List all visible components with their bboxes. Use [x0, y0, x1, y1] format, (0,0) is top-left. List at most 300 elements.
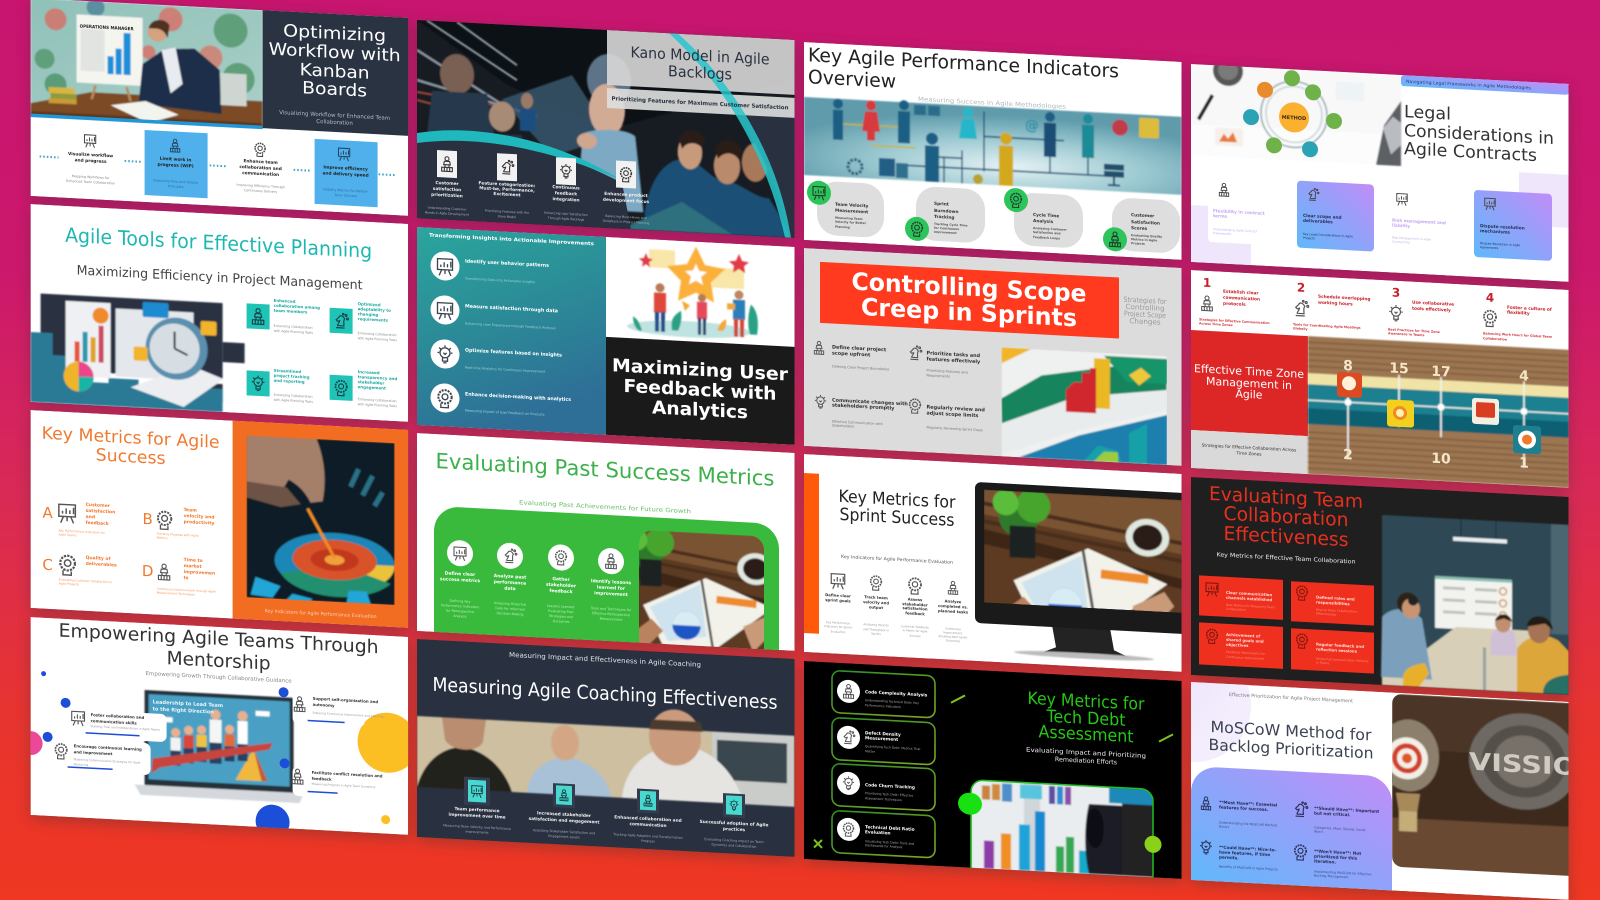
priority captions [1219, 820, 1372, 880]
feature labels: Feature categorization: [479, 180, 536, 189]
consideration labels: mechanisms [1480, 228, 1510, 236]
metric captions: and Throughput in [863, 627, 889, 632]
right teal swoosh [669, 33, 791, 238]
metric labels: output [869, 604, 883, 610]
panel: Measuring Agile Coaching Effectiveness [417, 639, 794, 857]
metric captions: Improvements [465, 830, 489, 835]
caption: Key Indicators for Agile Performance Evaluation [265, 608, 377, 620]
title: Optimizing [283, 21, 386, 47]
title: Backlogs [668, 62, 732, 84]
benefit labels: adaptability to [358, 306, 391, 313]
step numbers: 3 [1392, 286, 1400, 300]
step captions: Measurement [600, 617, 623, 622]
metric captions: Key Performance [826, 620, 850, 625]
callout captions: Fostering Continuous Improvement and Learning [313, 711, 384, 719]
step captions: Team Success [333, 193, 357, 198]
panel: Controlling Scope Creep in Sprints [804, 248, 1182, 466]
benefit labels [274, 297, 397, 391]
white icon circles [447, 539, 624, 575]
callout labels: Foster collaboration and [91, 712, 144, 720]
metric labels: Evaluation [865, 829, 891, 837]
metric labels: Code Complexity Analysis [865, 689, 928, 698]
metric labels: communication [629, 821, 667, 829]
decorative blobs [30, 671, 408, 828]
feature captions: Needs in Agile Development [425, 210, 470, 217]
step captions: Tools for Coordinating Agile Meetings [1293, 322, 1361, 330]
step captions: Evaluating Past [548, 609, 574, 614]
action captions: Real-time Analytics for Continuous Improvement [465, 366, 546, 374]
metric labels [86, 502, 215, 583]
right navy wedge [737, 115, 795, 238]
feature captions: Understanding Customer [428, 206, 467, 212]
priority labels: but not critical. [1314, 810, 1351, 817]
metric labels: improvemen [184, 569, 215, 577]
callout captions: Building Trust and Independence in Agile Teams [91, 724, 160, 732]
monitor stand [1042, 624, 1128, 657]
teal side panel [417, 227, 606, 435]
benefit captions: with Agile Planning Tools [274, 329, 313, 335]
step connectors [40, 156, 397, 175]
benefit captions: with Agile Planning Tools [274, 398, 313, 404]
gradient panel [1191, 766, 1392, 891]
progress underlines [68, 708, 345, 793]
title [1194, 362, 1304, 404]
benefit labels: requirements [358, 316, 389, 323]
step captions: Lessons Learned: [547, 604, 575, 609]
consideration labels: Risk management and [1392, 218, 1446, 226]
orange side panel [233, 421, 409, 628]
panel: Key Metrics for Tech Debt Assessment [804, 661, 1182, 891]
step labels [68, 152, 368, 178]
gradient cards [1297, 181, 1552, 261]
consideration captions: Frameworks [1213, 231, 1232, 236]
tactic labels: Communicate changes with [832, 397, 908, 407]
consideration labels: Clear scope and [1303, 213, 1342, 221]
panel: Key Metrics for Agile Success [31, 410, 409, 628]
title: Backlog Prioritization [1208, 736, 1374, 763]
card captions: Continuous Improvement [1226, 655, 1265, 661]
step captions: Across Time Zones [1199, 321, 1233, 327]
priority labels: prioritized for this [1314, 853, 1358, 861]
title: Considerations in [1404, 121, 1554, 149]
step labels: Schedule overlapping [1318, 294, 1371, 302]
step labels: working hours [1318, 300, 1353, 308]
metric labels: Quality of [86, 555, 110, 562]
feature captions: Through Agile Backlogs [547, 216, 585, 222]
milestone numbers: 2 [1343, 447, 1353, 463]
circle icons [454, 545, 616, 569]
card captions: Effectiveness [1316, 612, 1336, 617]
step captions: Visibility Metrics for Kanban [323, 187, 369, 194]
step labels: Identify lessons [591, 578, 631, 586]
step captions: Strategies and [549, 614, 573, 619]
KPI captions: Analyzing Customer [1033, 226, 1067, 232]
callout labels: Support self-organization and [313, 696, 378, 704]
letters A B C D: B [142, 510, 153, 528]
red title panel [1191, 330, 1308, 436]
step captions: Continuous Delivery [244, 188, 277, 194]
metric captions: Progress [641, 839, 655, 844]
consideration captions: Projects [1303, 236, 1315, 241]
card captions: Feedback Mechanisms for [1226, 650, 1266, 656]
feature labels: Enhances product [604, 191, 648, 199]
timeline photo [1308, 336, 1569, 488]
feature labels: Continuous [552, 184, 580, 192]
panel: Kano Model in Agile Backlogs [417, 20, 795, 240]
network illustration band: @ [1025, 118, 1039, 134]
consideration captions: Key Legal Considerations in Agile [1303, 232, 1353, 239]
navy curved footer [417, 131, 631, 229]
card captions: Keys to Team Collaboration [1316, 608, 1357, 614]
milestone numbers [1343, 358, 1529, 473]
benefit labels: Enhanced [274, 298, 296, 304]
step captions: Mapping Workflows for [72, 174, 110, 180]
feature captions [425, 204, 649, 226]
green panel [434, 506, 779, 674]
action labels: Enhance decision-making with analytics [465, 392, 571, 403]
title: Legal [1404, 102, 1451, 125]
subtitle: Evaluating Past Achievements for Future Growth [519, 499, 691, 515]
feature labels: prioritization [431, 192, 463, 199]
tactic captions [832, 363, 983, 435]
feature labels: Customer [435, 180, 460, 187]
metric labels: Analyze [945, 598, 962, 604]
benefit captions: with Agile Planning Tools [358, 336, 397, 342]
title [838, 487, 956, 531]
metric icons [59, 504, 171, 580]
subtitle [1026, 747, 1146, 768]
title [43, 426, 219, 464]
white callout cards [144, 696, 364, 796]
metric labels: Customer [86, 502, 111, 509]
metric labels: ts [184, 575, 189, 581]
consideration captions: Understanding Agile Contract [1213, 227, 1258, 234]
card labels: Defined roles and [1316, 595, 1355, 602]
panel heading: Transforming Insights into Actionable Improvements [429, 233, 594, 247]
milestone numbers: 8 [1343, 358, 1353, 374]
metric labels: velocity and [184, 513, 215, 521]
step labels: Enhance team [243, 158, 278, 166]
panel: Empowering Agile Teams Through Mentorship [30, 617, 408, 835]
metric labels [825, 592, 969, 619]
metric labels: practices [723, 826, 746, 833]
panel: Key Agile Performance Indicators Overview [804, 42, 1182, 260]
metric captions: in Metric for Agile [903, 628, 928, 633]
monitor screen photo [984, 486, 1182, 639]
subtitle: Evaluating Impact and Prioritizing [1026, 747, 1146, 760]
title [808, 44, 1119, 105]
consideration captions: Agreements [1480, 245, 1499, 250]
metric captions: Assessing Stakeholder Satisfaction and [533, 828, 595, 835]
action captions: Measuring Impact of User Feedback on Products [465, 409, 545, 417]
title [269, 24, 400, 97]
step labels: communication [1223, 295, 1260, 303]
panel: Effective Time Zone Management in Agile [1191, 270, 1569, 488]
priority labels: features for success. [1219, 804, 1269, 812]
callout captions: Mentoring [74, 762, 88, 767]
KPI captions: Satisfaction and [1033, 230, 1061, 235]
title: Tech Debt [1046, 707, 1126, 731]
metric captions [824, 620, 968, 644]
metric labels: Define clear [825, 592, 851, 598]
metric captions: Continuous [945, 626, 961, 631]
metric labels: feedback [905, 610, 925, 616]
metric captions: Indicators for Sprint [824, 624, 853, 630]
metric captions: Metrics [157, 536, 168, 540]
callout labels: communication skills [91, 718, 137, 726]
card labels: Clear communication [1226, 590, 1272, 597]
step captions: Decision-Making [496, 611, 524, 617]
benefit captions: Enhancing Collaboration [274, 393, 313, 399]
KPI captions: Tracking Cycle Time [934, 222, 968, 228]
side caption: Strategies for [1124, 295, 1167, 306]
consideration captions: Contracting [1392, 240, 1410, 244]
action labels [465, 259, 571, 403]
metric captions: Measuring Team Velocity and Performance [443, 823, 511, 831]
title: Analytics [652, 397, 748, 423]
metric captions: Sprints [871, 632, 881, 636]
title [1028, 689, 1145, 748]
metric captions: Engagement Levels [548, 834, 580, 840]
title: Agile [1236, 387, 1263, 402]
KPI labels: Sprint [934, 201, 949, 208]
card labels [1226, 590, 1364, 654]
metric captions: Tracking Progress with Agile [156, 532, 199, 538]
card labels: channels established [1226, 595, 1272, 602]
metric labels: satisfaction and engagement [529, 816, 599, 826]
panel: Agile Tools for Effective Planning [31, 204, 408, 422]
title: Workflow with [269, 40, 401, 66]
step captions: Data for Informed [495, 606, 525, 612]
metric labels: planned tasks [938, 608, 969, 615]
feature labels: feedback [555, 190, 577, 197]
step labels: protocols [1223, 301, 1246, 308]
callout captions: Mastering Communication Strategies for Agile [74, 757, 141, 765]
side caption [1124, 295, 1167, 327]
white icon circles [430, 251, 460, 413]
KPI labels: Satisfaction [1131, 219, 1160, 227]
title: Agile Tools for Effective Planning [65, 223, 372, 263]
footer caption [1202, 443, 1297, 460]
step captions [66, 174, 369, 199]
title: Measuring Agile Coaching Effectiveness [433, 674, 778, 714]
KPI labels: Tracking [934, 214, 954, 221]
subtitle: Key Metrics for Effective Team Collaboration [1216, 552, 1356, 566]
photo: meeting room [1381, 515, 1569, 695]
metric captions: Prioritizing Tech Debt: Effective [865, 791, 913, 798]
benefit labels: stakeholder [358, 379, 384, 386]
card labels: responsibilities [1316, 600, 1350, 606]
feature captions: Enhancing User Satisfaction [544, 211, 588, 217]
benefit labels: Optimized [358, 301, 381, 307]
benefit captions: Enhancing Collaboration [358, 331, 397, 337]
title: Boards [302, 78, 367, 102]
KPI labels: Burndown [934, 208, 959, 215]
priority captions: Understanding the MoSCoW Method [1219, 820, 1277, 827]
milestone markers [1337, 372, 1541, 454]
title: Creep in Sprints [861, 293, 1077, 332]
feature captions: Balancing Must-Haves and [605, 214, 647, 220]
step captions: Strategies for Effective Communication [1199, 317, 1270, 325]
tactic captions: Stakeholders [832, 423, 854, 429]
accent stripe [31, 114, 263, 129]
letters A B C D [42, 504, 153, 580]
benefit labels: project tracking [274, 373, 310, 380]
metric labels: Defect Density [865, 730, 901, 738]
metric labels: velocity and [863, 599, 889, 605]
tactic captions: Requirements [926, 373, 950, 379]
tactic labels: Regularly review and [926, 404, 985, 414]
side caption: Controlling [1125, 302, 1165, 313]
priority labels: **Should Have**: Important [1314, 805, 1379, 814]
side caption: Changes [1129, 316, 1161, 327]
outlined metric boxes [832, 670, 935, 858]
teal swoosh [417, 128, 622, 181]
metric labels: Increased stakeholder [537, 810, 592, 819]
consideration labels: terms [1213, 213, 1228, 220]
tactic captions: Regularly Reviewing Sprint Goals [926, 425, 983, 432]
metric captions: Evaluating Coaching Impact on Team [704, 837, 764, 844]
metric captions [59, 526, 216, 598]
step labels: communication [242, 170, 279, 178]
metric labels: and [86, 514, 95, 520]
metric labels: satisfaction [86, 508, 115, 515]
KPI captions: Improvement [934, 230, 957, 235]
step numbers [1203, 276, 1494, 305]
consideration icons [1219, 183, 1495, 210]
title: Key Metrics for [1027, 689, 1145, 715]
metric labels: Team [184, 507, 197, 514]
KPI captions: Velocity for Better [835, 220, 867, 225]
teal icon tiles [247, 303, 353, 401]
red title banner [820, 262, 1119, 339]
metric labels: productivity [184, 519, 215, 527]
metric captions [865, 698, 921, 850]
green corner dots [958, 792, 1162, 853]
benefit captions: with Agile Planning Tools [358, 402, 397, 408]
title: Empowering Agile Teams Through [59, 620, 379, 658]
feature labels: Must-be, Performance, [479, 185, 535, 194]
green badges [807, 177, 1127, 252]
benefit labels: Streamlined [274, 368, 301, 374]
icon tiles [437, 150, 636, 188]
step icons [1202, 295, 1496, 327]
hub label: METHOD [1282, 115, 1306, 122]
metric labels: Measurement [865, 735, 898, 743]
monitor body [975, 482, 1205, 635]
panel: Evaluating Team Collaboration Effectiveness [1191, 477, 1569, 695]
benefit labels: changing [358, 311, 378, 317]
step labels: and delivery speed [323, 170, 369, 179]
panel: Optimizing Workflow with Kanban Boards [31, 0, 409, 216]
benefit labels: engagement [358, 384, 386, 391]
tactic labels: stakeholders promptly [832, 402, 895, 412]
KPI captions: Projects [1131, 241, 1145, 246]
action labels: Identify user behavior patterns [465, 259, 549, 269]
lavender corner circle [1131, 639, 1251, 765]
metric labels: deliverables [86, 561, 117, 569]
tactic captions: Defining Clear Project Boundaries [832, 364, 889, 371]
step captions: Collaboration [1483, 336, 1508, 342]
metric captions: Visualizing Tech Debt: Tools and [865, 839, 914, 846]
title: Overview [808, 66, 896, 93]
title [852, 268, 1086, 333]
laptop slogan: to the Right Direction [153, 706, 214, 716]
step captions: for Retrospective [446, 609, 474, 614]
network illustration band [804, 95, 1182, 195]
photo: bulb and vision sign [1379, 693, 1582, 878]
consideration captions: Dispute Resolution in Agile [1480, 241, 1520, 247]
consideration labels: Flexibility in contract [1213, 208, 1265, 217]
metric labels: sprint goals [825, 597, 851, 603]
card labels: reflection sessions [1316, 647, 1358, 654]
illustration: rating star and people [627, 243, 758, 341]
metric captions: Understanding Technical Debt: Key [865, 698, 919, 705]
step labels: success metrics [440, 576, 480, 584]
title: Effective Time Zone [1194, 362, 1304, 381]
lavender decorations [1191, 155, 1569, 282]
photo: futuristic team [417, 20, 794, 240]
card captions: Best Metrics for Measuring Team [1226, 603, 1275, 609]
metric labels: Track team [864, 594, 888, 600]
callout labels: feedback [312, 776, 332, 782]
tactic icons [814, 341, 922, 414]
metric labels: Enhanced collaboration and [614, 814, 682, 824]
step labels: improvement [594, 590, 629, 598]
milestone numbers: 10 [1431, 451, 1451, 468]
grey footer [1191, 430, 1308, 474]
title: Success [96, 445, 166, 469]
metric labels: feedback [86, 520, 110, 527]
title: Sprint Success [839, 505, 955, 531]
panel: MoSCoW Method for Backlog Prioritization [1131, 639, 1582, 900]
step labels: and progress [75, 157, 107, 165]
gradient top banner [1401, 75, 1569, 95]
step labels: progress (WIP) [157, 162, 194, 170]
benefit labels: Increased [358, 369, 380, 375]
step labels: Analyze past [494, 573, 527, 581]
step labels: Define clear [445, 570, 476, 578]
step labels: Visualize workflow [68, 151, 113, 159]
KPI captions: Planning [835, 225, 850, 229]
tactic labels [832, 344, 985, 420]
tactic captions: Prioritizing Features and [926, 368, 968, 375]
letters A B C D: A [42, 504, 53, 522]
feature labels: integration [552, 196, 580, 204]
feature labels: satisfaction [433, 186, 461, 193]
consideration labels: liability [1392, 223, 1410, 230]
card labels: shared goals and [1226, 637, 1264, 644]
title [1209, 483, 1363, 552]
metric captions: Agile Teams [59, 532, 77, 537]
title: Management in [1206, 375, 1292, 392]
callout labels: Encourage continuous learning [74, 743, 142, 752]
tile icons [252, 308, 348, 396]
priority captions: Basics [1219, 824, 1229, 829]
panel: Evaluating Past Success Metrics [417, 433, 794, 675]
metric captions [443, 823, 764, 849]
metric captions: Matter [865, 749, 876, 754]
metric captions: Continuous Improvement through Agile [157, 587, 216, 594]
decorative dashes [814, 688, 1173, 866]
priority captions: Implementing MoSCoW for Effective [1314, 869, 1372, 876]
step captions: Outcomes [553, 619, 570, 624]
KPI captions [835, 216, 1162, 247]
metric captions: Quantifying Tech Debt: Metrics That [865, 744, 921, 751]
benefit labels: transparency and [358, 374, 397, 381]
benefit captions [274, 324, 397, 408]
subtitle band [607, 88, 795, 118]
